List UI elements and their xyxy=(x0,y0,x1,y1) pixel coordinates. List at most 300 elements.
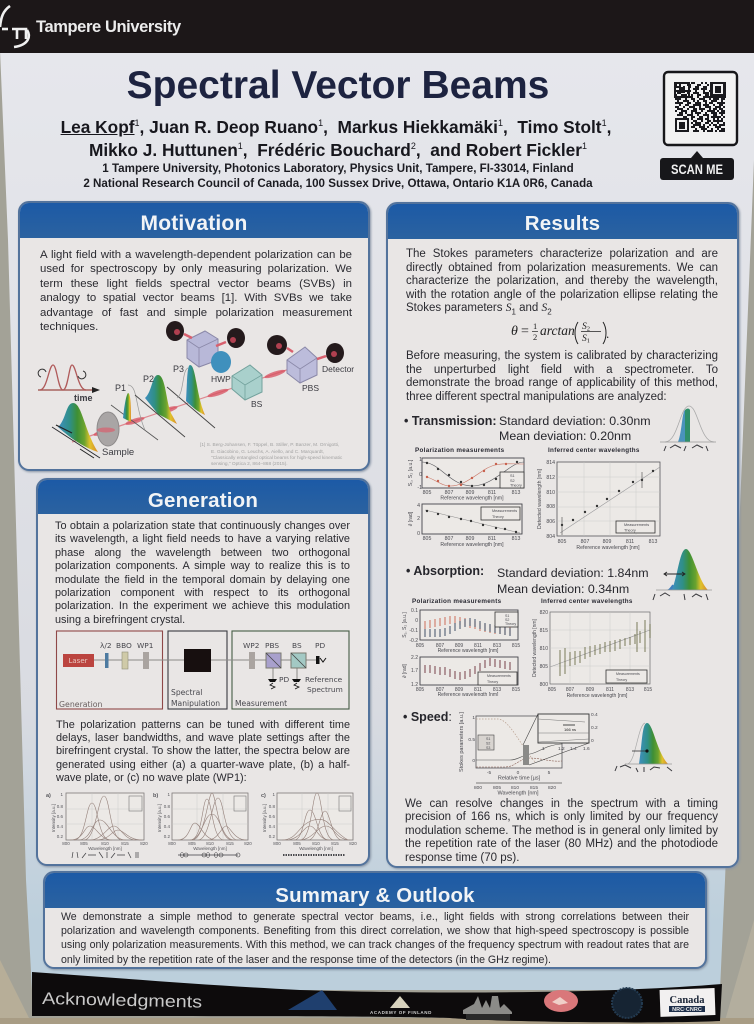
chart a: 810 xyxy=(101,841,109,846)
stokes plot: 805 xyxy=(416,643,424,649)
HWP: HWP xyxy=(211,374,231,384)
chart c: Wavelength [nm] xyxy=(299,846,333,851)
stokes plot: S₁, S₂ [a.u.] xyxy=(402,612,408,638)
absorption heading and stats: Mean deviation: 0.34nm xyxy=(497,582,629,596)
zoom inset: 1.4 xyxy=(570,746,577,752)
transmission heading and stats: Mean deviation: 0.20nm xyxy=(499,429,631,443)
icon: transmission spectrum xyxy=(660,406,716,452)
chart b: b) xyxy=(153,793,158,799)
stokes plot xyxy=(402,608,520,654)
stokes plot: Theory xyxy=(510,484,522,488)
results intro text: directly obtained from polarization measurements. We can xyxy=(406,262,718,274)
main plot: 0.5 xyxy=(468,737,475,743)
transmission heading and stats xyxy=(404,414,651,443)
generation text two: The polarization patterns can be tuned with different time xyxy=(56,719,350,731)
chart: absorption polarization measurements xyxy=(402,598,520,696)
absorption heading and stats xyxy=(406,564,649,596)
logo wordmark: Tampere University xyxy=(36,18,181,36)
formula: rotation angle: 2 xyxy=(587,326,590,332)
motivation text: term these light fields spectral vector beams (SVBs) in xyxy=(40,278,352,290)
angle plot: 811 xyxy=(488,536,496,542)
chart: spectra a, b, c xyxy=(46,792,357,858)
chart c: 1 xyxy=(272,792,275,797)
chart c: 0.8 xyxy=(269,804,275,809)
summary text: using only polarization measurements. With this method, we can track changes of the frequency spectrum with readout rates that are xyxy=(61,939,689,951)
results calibration text: demonstrate the broad range of applicability of this method, xyxy=(406,377,718,389)
reference citation xyxy=(200,442,343,467)
chart a: 820 xyxy=(140,841,148,846)
second axis xyxy=(474,783,562,796)
generation text: polarization components. A simple way to realize this is to xyxy=(55,560,350,572)
chart a: 800 xyxy=(62,841,70,846)
affiliations: 1 Tampere University, Photonics Laboratory, Physics Unit, Tampere, FI-33014, Finland xyxy=(102,162,574,175)
chart: transmission inferred center wavelengths: 808 xyxy=(546,504,555,510)
authors: Mikko J. Huttunen1, Frédéric Bouchard2, and Robert Fickler1 xyxy=(89,140,587,160)
acknowledgments label: Acknowledgments xyxy=(42,989,202,1012)
main plot: Relative time [µs] xyxy=(498,776,541,782)
main plot: Stokes parameters [a.u.] xyxy=(459,712,465,772)
generation text: To obtain a polarization state that continuously changes over xyxy=(55,520,350,532)
stokes plot: S2 xyxy=(510,479,515,483)
chart b: Wavelength [nm] xyxy=(193,846,227,851)
P3 xyxy=(167,364,215,428)
BS cube xyxy=(232,365,263,409)
chart b: 805 xyxy=(188,841,196,846)
formula: rotation angle: arctan xyxy=(540,323,575,338)
chart: absorption inferred center wavelengths: 811 xyxy=(606,687,614,693)
chart: absorption inferred center wavelengths: Detected wavelength [nm] xyxy=(532,618,538,677)
results conclusion text: response time (70 ps). xyxy=(405,852,519,864)
reference citation: [1] S. Berg-Johansen, F. Töppel, B. Stiller, P. Banzer, M. Ornigotti, xyxy=(200,442,339,448)
detectors xyxy=(166,321,344,363)
generation text two xyxy=(56,719,350,784)
P2 xyxy=(135,374,185,437)
chart: absorption inferred center wavelengths: Reference wavelength [nm] xyxy=(567,693,628,699)
panel: motivation xyxy=(18,201,370,471)
component labels: PD xyxy=(279,675,289,684)
chart: absorption inferred center wavelengths: Inferred center wavelengths xyxy=(541,598,633,605)
chart a xyxy=(46,792,148,858)
component labels: Reference xyxy=(305,675,343,684)
generation text two: delays, laser bandwidths, and wave plate settings after the xyxy=(56,732,350,744)
main plot: 5 xyxy=(548,770,551,776)
stokes plot: 813 xyxy=(493,643,501,649)
chart a: 1 xyxy=(60,792,63,797)
chart c: 0.4 xyxy=(269,824,275,829)
spectral manipulation box: Spectral xyxy=(171,688,202,697)
generation text: using a birefringent crystal. xyxy=(55,614,185,626)
P1: P1 xyxy=(115,383,126,393)
stokes plot: S1 xyxy=(510,474,515,478)
angle plot: Measurements xyxy=(492,509,517,513)
main plot xyxy=(459,712,562,782)
stokes plot: S1 xyxy=(505,614,509,618)
stokes plot: -1 xyxy=(417,485,422,491)
logo: Academy of Finland: ACADEMY OF FINLAND xyxy=(370,1010,432,1015)
formula: rotation angle: = xyxy=(521,324,529,339)
main plot: 1 xyxy=(472,715,475,721)
detector label: Detector xyxy=(322,364,354,374)
detectors xyxy=(268,656,326,689)
stokes plot: 1 xyxy=(419,457,422,463)
heading: generation: Generation xyxy=(148,489,258,512)
stokes plot: 811 xyxy=(474,643,482,649)
generation text: polarization. In the experiment we achieve this modulation xyxy=(55,600,350,612)
component labels: Spectrum xyxy=(307,685,343,694)
zoom inset: 1 xyxy=(542,746,545,752)
stokes plot: 807 xyxy=(436,643,444,649)
angle plot: ∂ [rad] xyxy=(402,663,408,678)
heading: summary and outlook: Summary & Outlook xyxy=(275,885,475,907)
results calibration text: Before measuring, the system is calibrated by characterizing xyxy=(406,350,718,362)
authors: Lea Kopf1, Juan R. Deop Ruano1, Markus Hiekkamäki1, Timo Stolt1, xyxy=(61,117,611,137)
angle plot: 2.2 xyxy=(411,655,418,661)
angle plot: Theory xyxy=(492,515,504,519)
second axis: 800 xyxy=(474,785,482,791)
chart a: 0.8 xyxy=(57,804,63,809)
chart a: 0.6 xyxy=(57,814,63,819)
second axis: 820 xyxy=(548,785,556,791)
stokes plot: 0.1 xyxy=(411,608,418,614)
stokes plot: Theory xyxy=(505,622,516,626)
icon: QR code with scan me tag: SCAN ME xyxy=(671,162,723,177)
laser: Laser xyxy=(68,657,88,665)
speed heading: • Speed: xyxy=(403,710,452,724)
chart: absorption inferred center wavelengths: 807 xyxy=(566,687,574,693)
motivation text: analogy to spatial vector beams [1]. With SVBs we take xyxy=(40,292,352,304)
main plot: 0 xyxy=(472,758,475,764)
chart b: 820 xyxy=(244,841,252,846)
formula: rotation angle: S xyxy=(582,334,587,344)
stokes plot: 805 xyxy=(423,490,431,496)
stokes plot: S₁, S₂ [a.u.] xyxy=(408,459,414,486)
angle plot: 2 xyxy=(417,516,420,522)
chart: transmission inferred center wavelengths: 811 xyxy=(626,539,634,545)
chart: absorption inferred center wavelengths: 809 xyxy=(586,687,594,693)
chart a: Wavelength [nm] xyxy=(88,846,122,851)
component labels: WP1 xyxy=(137,641,154,650)
second axis: 810 xyxy=(511,785,519,791)
sample disc xyxy=(97,412,134,458)
angle plot: 809 xyxy=(455,687,463,693)
chart c: 820 xyxy=(349,841,357,846)
chart b: 800 xyxy=(168,841,176,846)
main plot: S1 xyxy=(486,737,490,741)
generation box xyxy=(56,631,162,709)
chart: transmission inferred center wavelengths: 812 xyxy=(546,475,555,481)
beam xyxy=(72,353,337,442)
icon: speed spectrum xyxy=(614,722,672,772)
stokes plot: 807 xyxy=(445,490,453,496)
second axis: 815 xyxy=(530,785,538,791)
main plot: S2 xyxy=(486,742,490,746)
motivation text: A light field with a wavelength-dependent polarization can be xyxy=(40,249,352,261)
chart: absorption inferred center wavelengths: 813 xyxy=(626,687,634,693)
generation text xyxy=(55,520,350,626)
main plot: 0 xyxy=(517,770,520,776)
transmission heading and stats: • Transmission: xyxy=(404,414,497,428)
chart b: 1 xyxy=(167,792,170,797)
logo: blue triangle xyxy=(288,990,337,1010)
chart b: 0.2 xyxy=(164,834,170,839)
panel: summary and outlook xyxy=(43,871,707,969)
chart c: 800 xyxy=(273,841,281,846)
zoom inset: 0.2 xyxy=(591,725,598,731)
affiliations: 2 National Research Council of Canada, 100 Sussex Drive, Ottawa, Ontario K1A 0R6, Canada xyxy=(83,177,593,190)
chart: transmission inferred center wavelengths: Measurements xyxy=(624,523,649,527)
component labels: BBO xyxy=(116,641,132,650)
angle plot: 813 xyxy=(493,687,501,693)
component labels: λ/2 xyxy=(100,641,112,650)
motivation text: used for spectroscopy by only measuring polarization. We xyxy=(40,263,352,275)
results calibration text: the unperturbed light field with a spectrometer. To xyxy=(406,364,718,376)
chart: transmission inferred center wavelengths: 814 xyxy=(546,460,555,466)
heading: motivation: Motivation xyxy=(140,212,248,235)
chart b: 0.8 xyxy=(164,804,170,809)
formula: rotation angle xyxy=(511,321,609,344)
main plot: -5 xyxy=(487,770,491,776)
chart: transmission polarization measurements: Polarization measurements xyxy=(415,447,505,454)
results conclusion text: the repetition rate of the laser (80 MHz) and the photodiode xyxy=(405,838,718,850)
chart a: 815 xyxy=(121,841,129,846)
heading: results: Results xyxy=(525,212,600,235)
component labels: BS xyxy=(292,641,302,650)
measurement box: Measurement xyxy=(235,699,287,708)
chart: absorption inferred center wavelengths: 815 xyxy=(540,628,548,634)
generation text: modulate the field in the temporal domain by delaying one xyxy=(55,574,350,586)
stokes plot: 809 xyxy=(466,490,474,496)
stokes plot xyxy=(408,457,524,502)
stokes plot: Reference wavelength [nm] xyxy=(438,648,499,654)
panel: generation xyxy=(36,478,370,866)
pulses vs time xyxy=(38,365,100,403)
stokes plot: -0.2 xyxy=(409,638,418,644)
absorption heading and stats: • Absorption: xyxy=(406,564,484,578)
logo: dark round seal xyxy=(612,988,642,1018)
chart c: 810 xyxy=(312,841,320,846)
heading: motivation xyxy=(20,203,368,238)
motivation text: techniques. xyxy=(40,321,98,333)
chart: absorption inferred center wavelengths: Theory xyxy=(616,678,627,682)
chart b: 0.6 xyxy=(164,814,170,819)
results intro text: with the rotation angle of the polarization ellipse relating the xyxy=(406,288,718,300)
stokes plot: 811 xyxy=(488,490,496,496)
panel: results xyxy=(386,202,739,868)
zoom inset: 0 xyxy=(591,738,594,744)
results conclusion text xyxy=(405,798,718,864)
chart: transmission inferred center wavelengths xyxy=(537,447,660,550)
stokes plot: -0.1 xyxy=(409,628,418,634)
diagram: polarization measurement setup xyxy=(38,321,354,467)
chart c: 805 xyxy=(293,841,301,846)
chart: transmission inferred center wavelengths: 807 xyxy=(581,539,589,545)
stokes plot: 809 xyxy=(455,643,463,649)
angle plot: 805 xyxy=(423,536,431,542)
chart a: a) xyxy=(46,793,51,799)
chart: absorption inferred center wavelengths xyxy=(532,598,652,699)
upper cube xyxy=(187,331,218,367)
angle plot: Theory xyxy=(487,680,498,684)
angle plot: 1.7 xyxy=(411,668,418,674)
zoom inset xyxy=(523,712,598,765)
angle plot xyxy=(408,503,522,548)
summary text: We demonstrate a simple method to generate spectral vector beams, i.e., light fields with strong correlations between their xyxy=(61,911,689,923)
schematic: generation, spectral manipulation, measurement xyxy=(56,630,350,710)
zoom inset: 1.6 xyxy=(583,746,590,752)
footer: acknowledgments band and logos xyxy=(32,972,722,1022)
chart: absorption inferred center wavelengths: 810 xyxy=(540,646,548,652)
chart c xyxy=(261,792,357,855)
summary text xyxy=(61,911,689,966)
formula: rotation angle: 1 xyxy=(587,338,590,344)
absorption heading and stats: Standard deviation: 1.84nm xyxy=(497,566,649,580)
chart b: 815 xyxy=(226,841,234,846)
P2: P2 xyxy=(143,374,154,384)
P1 xyxy=(111,383,158,440)
chart a: Intensity [a.u.] xyxy=(51,804,56,832)
chart: absorption inferred center wavelengths: 815 xyxy=(644,687,652,693)
zoom inset: 0.4 xyxy=(591,712,598,718)
chart c: c) xyxy=(261,793,266,799)
stokes plot: 815 xyxy=(512,643,520,649)
chart: transmission inferred center wavelengths: 804 xyxy=(546,534,555,540)
results conclusion text: modulation scheme. The method is in general only limited by xyxy=(405,825,718,837)
chart: absorption inferred center wavelengths: 805 xyxy=(548,687,556,693)
chart: speed stokes parameters xyxy=(459,712,598,796)
chart: absorption inferred center wavelengths: 820 xyxy=(540,610,548,616)
component labels xyxy=(100,641,343,694)
generation text two: birefringent crystal. To show the latter, the spectra below are xyxy=(56,745,350,757)
input spectrum xyxy=(52,403,100,458)
formula: rotation angle: 2 xyxy=(533,332,537,342)
logo: Canada NRC: Canada xyxy=(669,995,705,1006)
results intro text xyxy=(406,248,718,316)
angle plot: Measurements xyxy=(487,674,511,678)
angle plot: 809 xyxy=(466,536,474,542)
title: Spectral Vector Beams xyxy=(127,64,549,107)
logo: Canada NRC xyxy=(660,988,715,1017)
results intro text: The Stokes parameters characterize polarization and are xyxy=(406,248,718,260)
logo: pink seal xyxy=(544,990,578,1012)
chart: absorption inferred center wavelengths: 800 xyxy=(540,682,548,688)
formula: rotation angle: . xyxy=(606,326,609,341)
top banner xyxy=(0,0,754,53)
formula: rotation angle: 1 xyxy=(533,321,537,331)
P3: P3 xyxy=(173,364,184,374)
optical elements xyxy=(105,649,306,672)
icon: Tampere University logo xyxy=(0,5,30,48)
heading: generation xyxy=(38,480,368,514)
chart b: 810 xyxy=(206,841,214,846)
chart: transmission inferred center wavelengths: Inferred center wavelengths xyxy=(548,447,640,454)
second axis: 805 xyxy=(493,785,501,791)
spectral manipulation box xyxy=(168,631,227,709)
generation text: its wavelength, a light field needs to have a varying relative xyxy=(55,533,350,545)
stokes plot: 0 xyxy=(419,472,422,478)
angle plot: 1.2 xyxy=(411,682,418,688)
chart b: Intensity [a.u.] xyxy=(157,804,162,832)
generation text two: generated using either (a) a quarter-wave plate, (b) a half- xyxy=(56,759,350,771)
laser xyxy=(63,654,94,667)
formula: rotation angle: θ xyxy=(511,324,518,339)
results conclusion text: We can resolve changes in the spectrum with a timing xyxy=(405,798,718,810)
stokes plot: S2 xyxy=(505,618,509,622)
angle plot: 811 xyxy=(474,687,482,693)
zoom inset: 166 ns xyxy=(564,727,576,732)
summary text: polarization and wavelength components. Benefiting from this direct correlation, we show that high-speed spectroscopy is possible xyxy=(61,925,689,937)
angle plot: 4 xyxy=(417,503,420,509)
generation text: phase along the wavelength between two orthogonal xyxy=(55,547,350,559)
angle plot: ∂ [rad] xyxy=(408,511,414,526)
results intro text: characterize the polarization, and thereby the wavelength, xyxy=(406,275,718,287)
angle plot: 0 xyxy=(417,531,420,537)
chart: transmission inferred center wavelengths: 810 xyxy=(546,490,555,496)
angle plot: 807 xyxy=(445,536,453,542)
chart a: 0.2 xyxy=(57,834,63,839)
chart: transmission polarization measurements xyxy=(408,447,524,548)
measurement box xyxy=(232,631,349,709)
authors xyxy=(60,117,611,160)
chart b: 0.4 xyxy=(164,824,170,829)
BS cube: BS xyxy=(251,399,263,409)
chart a: 0.4 xyxy=(57,824,63,829)
chart c: 0.2 xyxy=(269,834,275,839)
pulses vs time: time xyxy=(74,393,93,403)
reference citation: "Classically entangled optical beams for high-speed kinematic xyxy=(211,455,343,461)
chart c: 0.6 xyxy=(269,814,275,819)
sample disc: Sample xyxy=(102,447,134,458)
chart: transmission inferred center wavelengths: Detected wavelength [nm] xyxy=(537,468,543,529)
chart: absorption inferred center wavelengths: Measurements xyxy=(616,672,640,676)
reference citation: E. Giacobino, G. Leuchs, A. Aiello, and C. Marquardt, xyxy=(211,449,324,455)
formula: rotation angle: S xyxy=(582,322,587,332)
logo: Academy of Finland xyxy=(370,996,432,1015)
component labels: PD xyxy=(315,641,325,650)
spectral manipulation box: Manipulation xyxy=(171,699,220,708)
angle plot: 813 xyxy=(512,536,520,542)
chart: transmission inferred center wavelengths: 805 xyxy=(558,539,566,545)
chart c: Intensity [a.u.] xyxy=(262,804,267,832)
component labels: PBS xyxy=(265,641,279,650)
main plot: S3 xyxy=(486,746,490,750)
chart: transmission inferred center wavelengths: 813 xyxy=(649,539,657,545)
chart a: 805 xyxy=(80,841,88,846)
second axis: Wavelength [nm] xyxy=(497,790,539,796)
icon: QR code with scan me tag xyxy=(660,70,738,180)
chart: transmission inferred center wavelengths: 809 xyxy=(603,539,611,545)
stokes plot: Reference wavelength [nm] xyxy=(440,496,504,502)
chart c: 815 xyxy=(331,841,339,846)
angle plot: 805 xyxy=(416,687,424,693)
PBS cube xyxy=(287,347,319,393)
angle plot xyxy=(402,655,520,698)
transmission heading and stats: Standard deviation: 0.30nm xyxy=(499,414,651,428)
motivation text: advantage of fast and simple polarization measurement xyxy=(40,307,352,319)
heading: results xyxy=(388,204,737,239)
chart: transmission inferred center wavelengths: Theory xyxy=(624,528,636,532)
heading: summary and outlook xyxy=(45,873,705,908)
generation text two: wave plate, or (c) no wave plate (WP1): xyxy=(56,772,247,784)
angle plot: Reference wavelength [nm] xyxy=(440,542,504,548)
results conclusion text: precision of 166 ns, which is only limited by our frequency xyxy=(405,811,718,823)
angle plot: 815 xyxy=(512,687,520,693)
stokes plot: 0 xyxy=(415,618,418,624)
stokes plot: 813 xyxy=(512,490,520,496)
chart b xyxy=(153,792,252,858)
PBS cube: PBS xyxy=(302,383,319,393)
component labels: WP2 xyxy=(243,641,259,650)
zoom inset: 1.2 xyxy=(558,746,565,752)
